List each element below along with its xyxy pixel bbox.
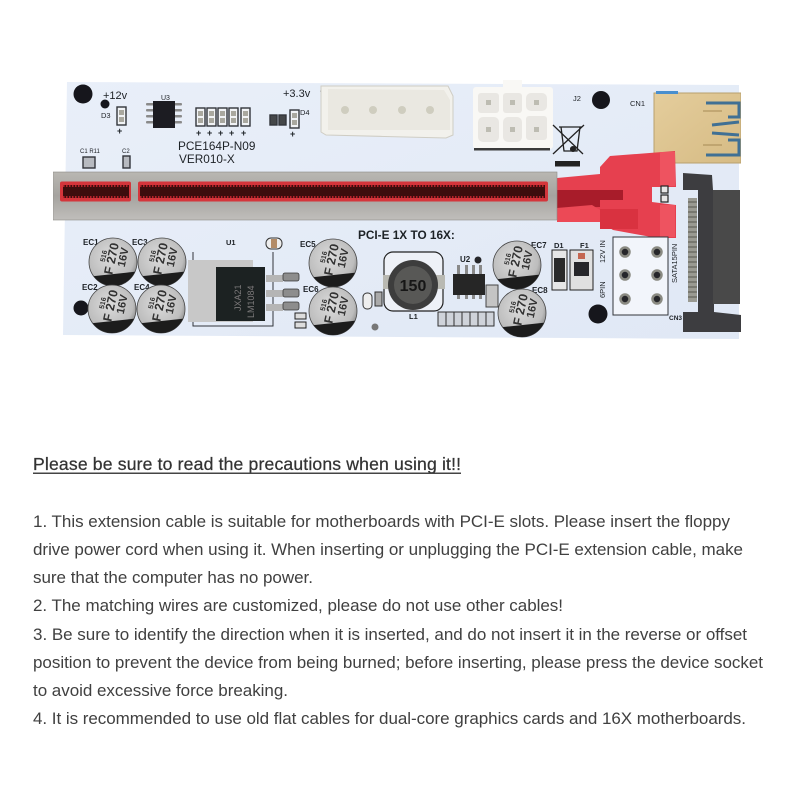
recycling icon bbox=[553, 125, 584, 166]
inductor L1 bbox=[383, 252, 445, 311]
capacitor EC3: 516 bbox=[149, 250, 158, 263]
silkscreen labels: PCI-E 1X TO 16X: bbox=[358, 228, 455, 242]
silkscreen labels: EC3 bbox=[132, 238, 148, 247]
USB 3.0 port bbox=[654, 91, 741, 163]
SATA connector bbox=[683, 173, 741, 332]
silkscreen labels: C1 R11 bbox=[80, 149, 101, 155]
silkscreen labels bbox=[80, 88, 682, 322]
item 1: 1. This extension cable is suitable for motherboards with PCI-E slots. Please insert the floppy bbox=[33, 512, 730, 531]
capacitor EC6: 516 bbox=[320, 299, 329, 312]
6-pin solder pad block bbox=[613, 237, 668, 315]
capacitor EC5: 16V bbox=[336, 247, 352, 269]
LED pads bbox=[119, 110, 297, 125]
capacitor EC5: F 270 bbox=[321, 243, 342, 277]
silkscreen labels: PCE164P-N09 bbox=[178, 139, 255, 153]
chip U3 bbox=[146, 101, 182, 128]
silkscreen labels: 6PIN bbox=[598, 281, 607, 298]
product photo: PCI-E riser board bbox=[53, 80, 741, 342]
item 1: drive power cord when using it. When inserting or unplugging the PCI-E extension cable, make bbox=[33, 540, 743, 559]
regulator U1 bbox=[188, 252, 299, 326]
silkscreen labels: 12V IN bbox=[598, 240, 607, 263]
plus marks: + bbox=[241, 128, 246, 138]
controller U2 bbox=[453, 256, 498, 307]
diode D1 bbox=[552, 250, 567, 290]
capacitor EC7: 516 bbox=[504, 253, 513, 266]
item 1: sure that the computer has no power. bbox=[33, 568, 313, 587]
capacitor EC8: F 270 bbox=[510, 293, 531, 327]
mounting holes bbox=[74, 84, 610, 324]
silkscreen labels: EC4 bbox=[134, 283, 150, 292]
silkscreen labels: C2 bbox=[122, 149, 130, 155]
silkscreen labels: D1 bbox=[554, 241, 564, 250]
LED row bbox=[83, 107, 299, 168]
plus marks: + bbox=[229, 128, 234, 138]
small parts beside latch bbox=[661, 186, 668, 202]
plus marks: + bbox=[218, 128, 223, 138]
6-pin power connector bbox=[473, 80, 553, 150]
small SMD parts near regulator bbox=[266, 238, 382, 330]
resistor array bbox=[438, 312, 494, 326]
silkscreen labels: L1 bbox=[409, 312, 418, 321]
capacitor EC5 bbox=[308, 238, 358, 287]
heading: precautions: Please be sure to read the precautions when using it!! bbox=[33, 454, 461, 474]
silkscreen labels: J2 bbox=[573, 94, 581, 103]
silkscreen labels: J4 bbox=[320, 88, 327, 94]
16X slot bbox=[138, 182, 548, 202]
capacitor EC2: F 270 bbox=[100, 289, 121, 323]
capacitor EC4 bbox=[136, 284, 186, 334]
silkscreen labels: +3.3v bbox=[283, 88, 311, 100]
plus marks: + bbox=[196, 128, 201, 138]
capacitor EC7 bbox=[492, 240, 542, 290]
item 4: 4. It is recommended to use old flat cables for dual-core graphics cards and 16X motherboards. bbox=[33, 709, 746, 728]
silkscreen labels: D4 bbox=[300, 108, 310, 117]
capacitor EC8: 16V bbox=[525, 297, 541, 319]
silkscreen labels: EC7 bbox=[531, 241, 547, 250]
capacitor EC8 bbox=[498, 288, 546, 338]
plus marks: + bbox=[207, 128, 212, 138]
capacitor EC1: F 270 bbox=[101, 242, 122, 276]
capacitor EC6: F 270 bbox=[321, 291, 342, 325]
silkscreen labels: CN1 bbox=[630, 99, 645, 108]
silkscreen labels: EC5 bbox=[300, 240, 316, 249]
item 3: position to prevent the device from being burned; before inserting, please press the device socket bbox=[33, 653, 763, 672]
capacitor EC6: 16V bbox=[336, 295, 352, 317]
capacitor EC2: 516 bbox=[99, 297, 108, 310]
silkscreen labels: F1 bbox=[580, 241, 589, 250]
text block: precautions list bbox=[33, 512, 763, 728]
silkscreen labels: +12v bbox=[103, 90, 128, 102]
capacitor EC4: F 270 bbox=[149, 289, 170, 323]
item 3 bbox=[33, 625, 763, 700]
metal PCI-E slot bracket bbox=[53, 172, 557, 220]
capacitor EC7: F 270 bbox=[505, 245, 526, 279]
plus marks bbox=[117, 126, 295, 139]
capacitor EC3: F 270 bbox=[150, 242, 171, 276]
capacitor EC3 bbox=[138, 238, 186, 286]
silkscreen labels: EC2 bbox=[82, 283, 98, 292]
silkscreen labels: U2 bbox=[460, 255, 471, 264]
regulator U1: JXA21 bbox=[233, 284, 243, 311]
capacitors bbox=[87, 238, 551, 342]
silkscreen labels: U3 bbox=[161, 95, 170, 102]
capacitor EC4: 516 bbox=[148, 297, 157, 310]
capacitor EC2 bbox=[88, 284, 136, 334]
plus marks: + bbox=[117, 126, 122, 136]
item 3: to avoid excessive force breaking. bbox=[33, 681, 288, 700]
1X slot bbox=[60, 182, 131, 202]
circuit board bbox=[63, 82, 739, 339]
molex connector bbox=[321, 86, 453, 138]
capacitor EC2: 16V bbox=[115, 293, 131, 315]
silkscreen labels: EC8 bbox=[532, 286, 548, 295]
item 3: 3. Be sure to identify the direction when it is inserted, and do not insert it in the reverse or offset bbox=[33, 625, 747, 644]
regulator U1: LM1084 bbox=[246, 285, 256, 318]
capacitor EC1 bbox=[88, 238, 138, 286]
item 1 bbox=[33, 512, 743, 587]
silkscreen labels: EC6 bbox=[303, 285, 319, 294]
capacitor EC3: 16V bbox=[165, 246, 181, 268]
capacitor EC8: 516 bbox=[509, 301, 518, 314]
silkscreen labels: U1 bbox=[226, 238, 236, 247]
capacitor EC1: 16V bbox=[116, 246, 132, 268]
fuse F1 bbox=[570, 250, 593, 290]
capacitor EC4: 16V bbox=[164, 293, 180, 315]
capacitor EC6 bbox=[308, 286, 358, 336]
item 2: 2. The matching wires are customized, please do not use other cables! bbox=[33, 596, 563, 615]
red latch bbox=[557, 151, 676, 238]
capacitor EC5: 516 bbox=[320, 251, 329, 264]
silkscreen labels: D3 bbox=[101, 111, 111, 120]
capacitor EC7: 16V bbox=[520, 249, 536, 271]
plus marks: + bbox=[290, 129, 295, 139]
capacitor EC1: 516 bbox=[100, 250, 109, 263]
silkscreen labels: VER010-X bbox=[179, 152, 235, 166]
silkscreen labels: EC1 bbox=[83, 238, 99, 247]
silkscreen labels: CN3 bbox=[669, 315, 682, 322]
inductor L1: 150 bbox=[400, 278, 426, 295]
silkscreen labels: SATA15PIN bbox=[670, 244, 679, 283]
